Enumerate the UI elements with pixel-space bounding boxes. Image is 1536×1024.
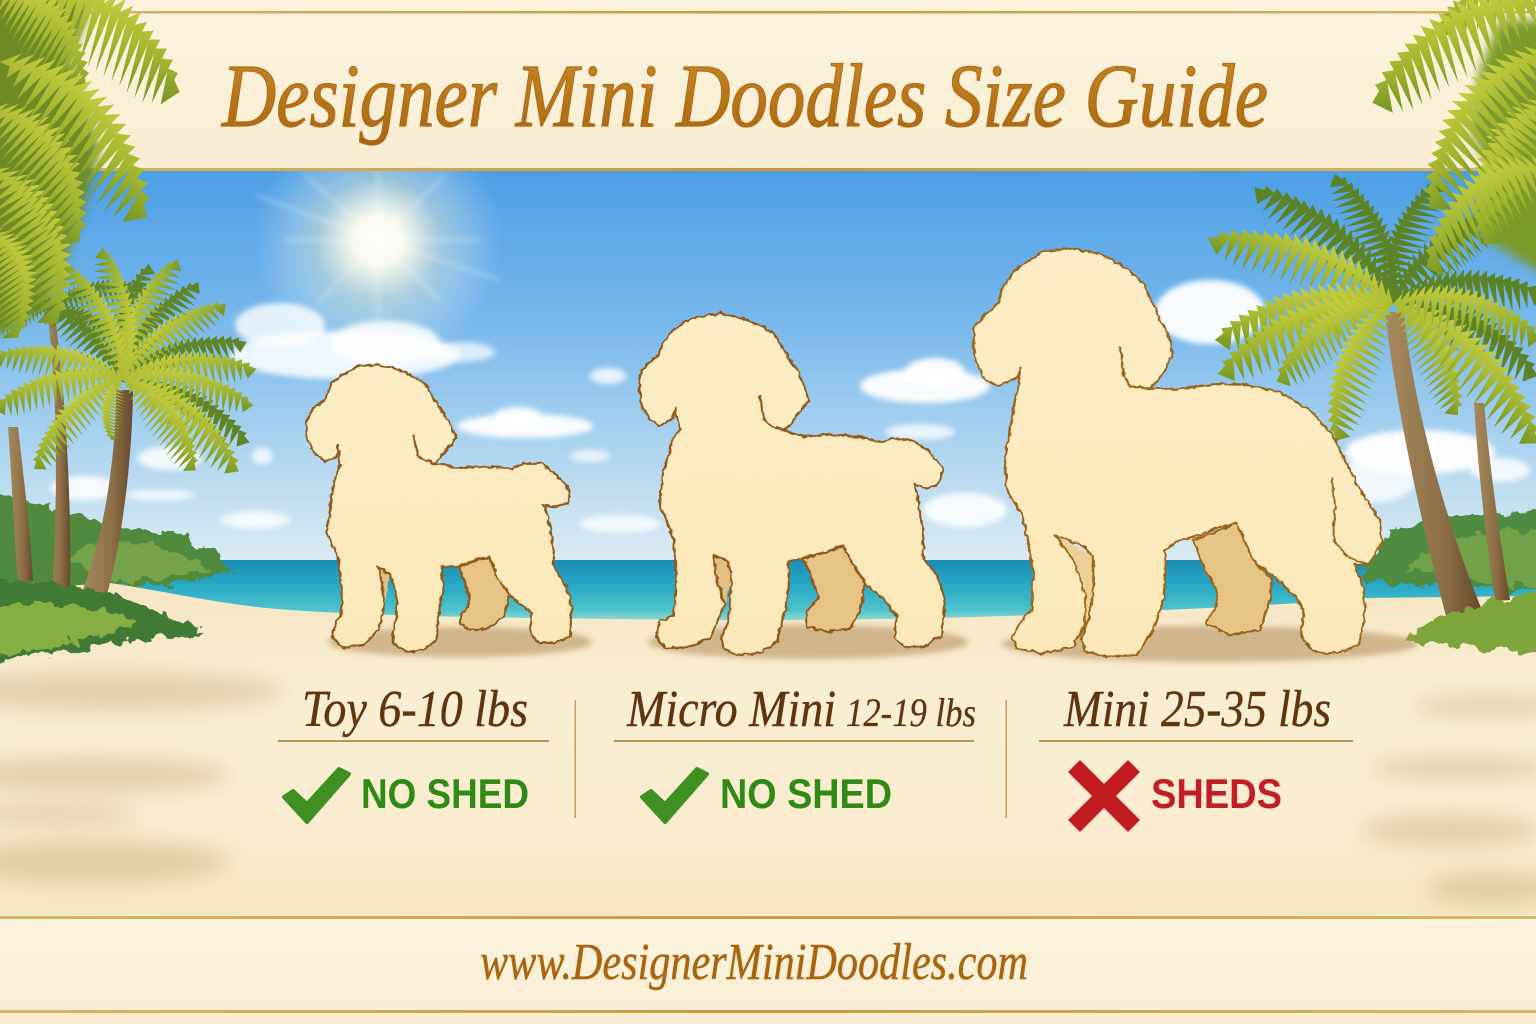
fronds: front — [0, 247, 260, 481]
sun — [253, 115, 503, 365]
palm: top-right corner — [1350, 0, 1536, 290]
palm tree: left group — [0, 247, 261, 598]
distant island left — [0, 495, 232, 592]
bushes left — [0, 581, 205, 662]
label column: mini: Mini 25-35 lbs — [1063, 681, 1331, 738]
dog shadows — [328, 625, 1418, 662]
label column: toy: Toy 6-10 lbs — [302, 681, 528, 738]
label column: micro mini: NO SHED — [720, 770, 892, 817]
body — [973, 248, 1382, 657]
bottom banner — [0, 915, 1536, 1024]
sky — [0, 165, 1536, 565]
dog: mini silhouette — [973, 248, 1382, 657]
icon: cross mark — [1068, 760, 1140, 832]
body — [639, 313, 945, 655]
bushes right — [1404, 590, 1536, 655]
far foreleg sliver — [713, 555, 732, 605]
palm shadows on sand — [0, 672, 1536, 904]
ear and tail lines — [1120, 347, 1368, 565]
fronds: behind — [1246, 158, 1536, 388]
body — [306, 365, 572, 652]
ear line — [413, 435, 435, 463]
label column: mini: SHEDS — [1151, 770, 1282, 817]
website url: www.DesignerMiniDoodles.com — [480, 934, 1028, 991]
top banner — [0, 0, 1536, 171]
trunk: far right — [1474, 403, 1510, 601]
label column: toy — [278, 681, 549, 822]
far foreleg sliver — [378, 567, 390, 607]
dog: micro mini silhouette — [639, 313, 945, 655]
label column: micro mini: Micro Mini — [626, 681, 836, 738]
trunk: middle — [46, 306, 70, 592]
far hind leg — [458, 557, 510, 630]
palm tree: right main — [1201, 158, 1536, 616]
fronds: behind — [0, 261, 261, 452]
icon: check mark — [284, 769, 349, 822]
trunk: main — [1385, 312, 1482, 616]
label column: mini — [1039, 681, 1353, 832]
palm: top-left corner — [0, 0, 204, 347]
label column: toy: NO SHED — [361, 770, 529, 817]
far hind leg — [1193, 523, 1272, 635]
label column: micro mini — [614, 681, 976, 822]
sea — [0, 560, 1536, 622]
clouds — [50, 280, 1530, 533]
trunk: far left — [8, 427, 33, 582]
distant island right — [1362, 512, 1536, 590]
title: Designer Mini Doodles Size Guide — [220, 47, 1268, 146]
sand beach — [0, 583, 1536, 920]
fronds: front — [1201, 193, 1536, 456]
far hind leg — [803, 547, 865, 632]
ear line — [760, 394, 783, 430]
trunk: main — [80, 390, 133, 598]
icon: check mark — [642, 769, 707, 822]
dog: toy silhouette — [306, 365, 572, 652]
label column: micro mini: 12-19 lbs — [846, 690, 976, 735]
far foreleg sliver — [1055, 535, 1093, 623]
